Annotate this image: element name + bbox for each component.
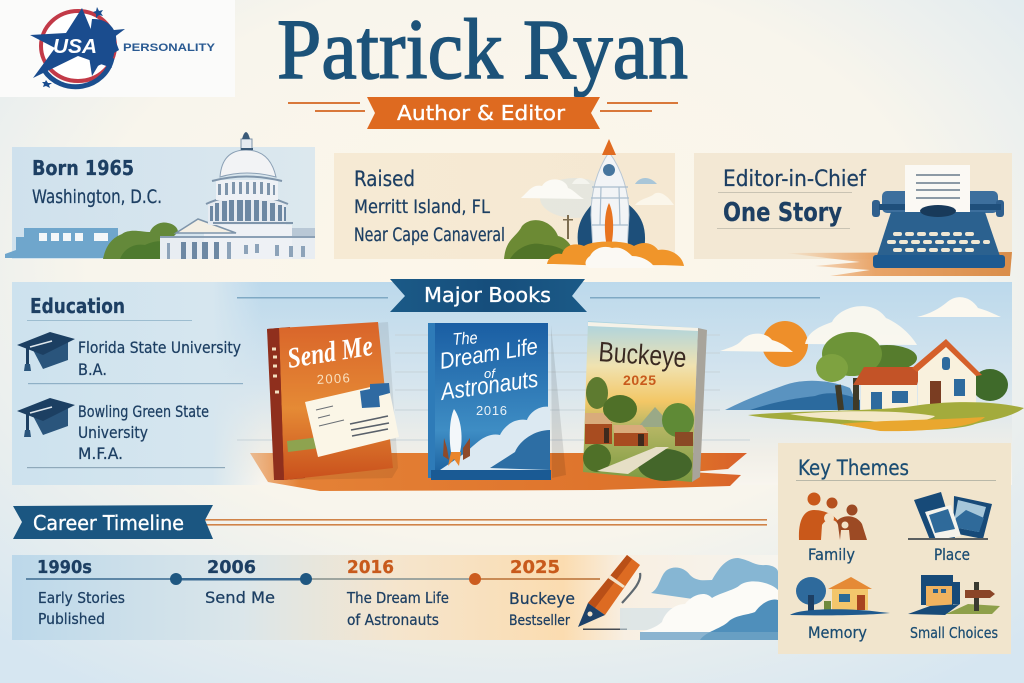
illustration: countryside landscape xyxy=(720,297,1024,431)
book: Send Me xyxy=(267,322,399,480)
book: Send Me: 2006 xyxy=(316,370,350,387)
timeline 2006: 2006 xyxy=(207,557,256,578)
book: The Dream Life of Astronauts: Astronauts xyxy=(437,366,540,406)
timeline 2025: Buckeye xyxy=(509,589,575,608)
icon: rocket xyxy=(547,139,684,268)
text: Washington, D.C.: Washington, D.C. xyxy=(32,186,162,208)
small house xyxy=(853,367,922,411)
road and foreground on cover xyxy=(638,449,692,481)
heading banner: Major Books: Major Books xyxy=(424,283,551,307)
ground xyxy=(748,402,1024,430)
book: The Dream Life of Astronauts xyxy=(428,323,566,480)
sun xyxy=(762,321,808,367)
book: Buckeye xyxy=(583,321,707,482)
panel: career timeline xyxy=(12,555,778,640)
icon: graduation cap 1 xyxy=(17,332,75,371)
logo: USA Personality: USA xyxy=(53,36,97,58)
hills and trees on cover xyxy=(638,407,673,427)
heading: Education: Education xyxy=(30,294,125,318)
heading banner: Major Books xyxy=(390,279,587,312)
icon: clouds xyxy=(521,178,674,218)
icon: low blue building xyxy=(5,228,118,258)
timeline 1990s: 1990s xyxy=(37,557,92,578)
icon: family xyxy=(799,492,867,540)
text: Family: Family xyxy=(808,545,855,564)
orange shelf xyxy=(250,453,747,491)
text: Bowling Green State University M.F.A. xyxy=(78,402,209,463)
book: The Dream Life of Astronauts: 2016 xyxy=(476,403,507,418)
book: The Dream Life of Astronauts: of xyxy=(484,366,496,381)
logo: USA Personality xyxy=(0,0,235,97)
text: Merritt Island, FL: Merritt Island, FL xyxy=(354,196,490,218)
rocket on cover xyxy=(443,409,470,466)
timeline 2006: Send Me xyxy=(205,588,275,607)
text: Editor-in-Chief: Editor-in-Chief xyxy=(723,167,867,192)
timeline 1990s: Early Stories xyxy=(38,589,125,607)
title: Patrick Ryan xyxy=(277,1,688,97)
text: Memory: Memory xyxy=(808,623,867,642)
clouds xyxy=(620,558,778,640)
text: Small Choices: Small Choices xyxy=(910,624,998,642)
timeline 2016 xyxy=(346,557,449,629)
book: Buckeye: Buckeye xyxy=(598,336,688,373)
icon: pen xyxy=(578,555,640,630)
subtitle ribbon: Author & Editor xyxy=(288,97,678,129)
book: Buckeye: 2025 xyxy=(623,372,656,388)
panel: editor xyxy=(694,153,1012,276)
panel: raised xyxy=(334,139,684,268)
timeline 1990s: Published xyxy=(38,610,105,628)
text: One Story: One Story xyxy=(723,198,842,228)
heading banner: Career Timeline: Career Timeline xyxy=(33,511,184,535)
heading: Born 1965: Born 1965 xyxy=(32,156,134,180)
clouds xyxy=(720,297,1001,352)
heading banner: Career Timeline xyxy=(13,505,767,539)
orange smear xyxy=(785,252,1012,276)
book: Send Me: Send Me xyxy=(285,330,375,375)
barns on cover xyxy=(585,413,693,446)
text: Florida State University B.A.: Florida State University xyxy=(78,338,241,357)
icon: graduation cap 2 xyxy=(17,398,75,437)
panel: education and major books xyxy=(12,282,1012,485)
text: Place: Place xyxy=(934,545,970,564)
timeline 1990s xyxy=(37,557,125,628)
heading: Key Themes: Key Themes xyxy=(798,456,909,480)
tree xyxy=(816,332,917,410)
timeline 2025: Bestseller xyxy=(509,613,570,629)
timeline 2025 xyxy=(509,557,575,629)
typewriter keys xyxy=(887,232,990,252)
postcard xyxy=(305,383,399,457)
clouds on cover xyxy=(440,407,550,470)
text: Near Cape Canaveral: Near Cape Canaveral xyxy=(354,224,505,246)
panel: born xyxy=(5,132,315,259)
timeline 2016: of Astronauts xyxy=(347,611,439,629)
icon: green bush and pole xyxy=(504,215,575,259)
icon: small choices xyxy=(908,575,1000,615)
timeline 2016: The Dream Life xyxy=(346,589,449,607)
text: Bowling Green State University M.F.A.: Bowling Green State xyxy=(78,402,209,421)
text: Bowling Green State University M.F.A.: University xyxy=(78,423,148,442)
icon: trees xyxy=(103,223,178,259)
book: The Dream Life of Astronauts: Dream Life xyxy=(438,333,540,374)
text: Florida State University B.A. xyxy=(78,338,241,379)
icon: typewriter xyxy=(872,165,1005,268)
logo: USA Personality: PERSONALITY xyxy=(123,42,216,54)
timeline 2016: 2016 xyxy=(347,557,394,578)
subtitle ribbon: Author & Editor: Author & Editor xyxy=(397,101,566,125)
icon: memory xyxy=(790,577,890,615)
text: Raised: Raised xyxy=(354,167,415,191)
icon: Capitol building xyxy=(160,132,315,259)
text: Bowling Green State University M.F.A.: M.F.A. xyxy=(78,444,123,463)
timeline axis xyxy=(26,573,600,585)
icon: place xyxy=(908,492,992,540)
timeline 2025: 2025 xyxy=(510,557,560,578)
text: Florida State University B.A.: B.A. xyxy=(78,360,107,379)
hills xyxy=(725,381,860,410)
panel: key themes xyxy=(778,443,1011,654)
education section xyxy=(17,294,243,468)
large house xyxy=(912,339,982,408)
book: The Dream Life of Astronauts: The xyxy=(452,328,478,349)
timeline 2006 xyxy=(205,557,275,607)
